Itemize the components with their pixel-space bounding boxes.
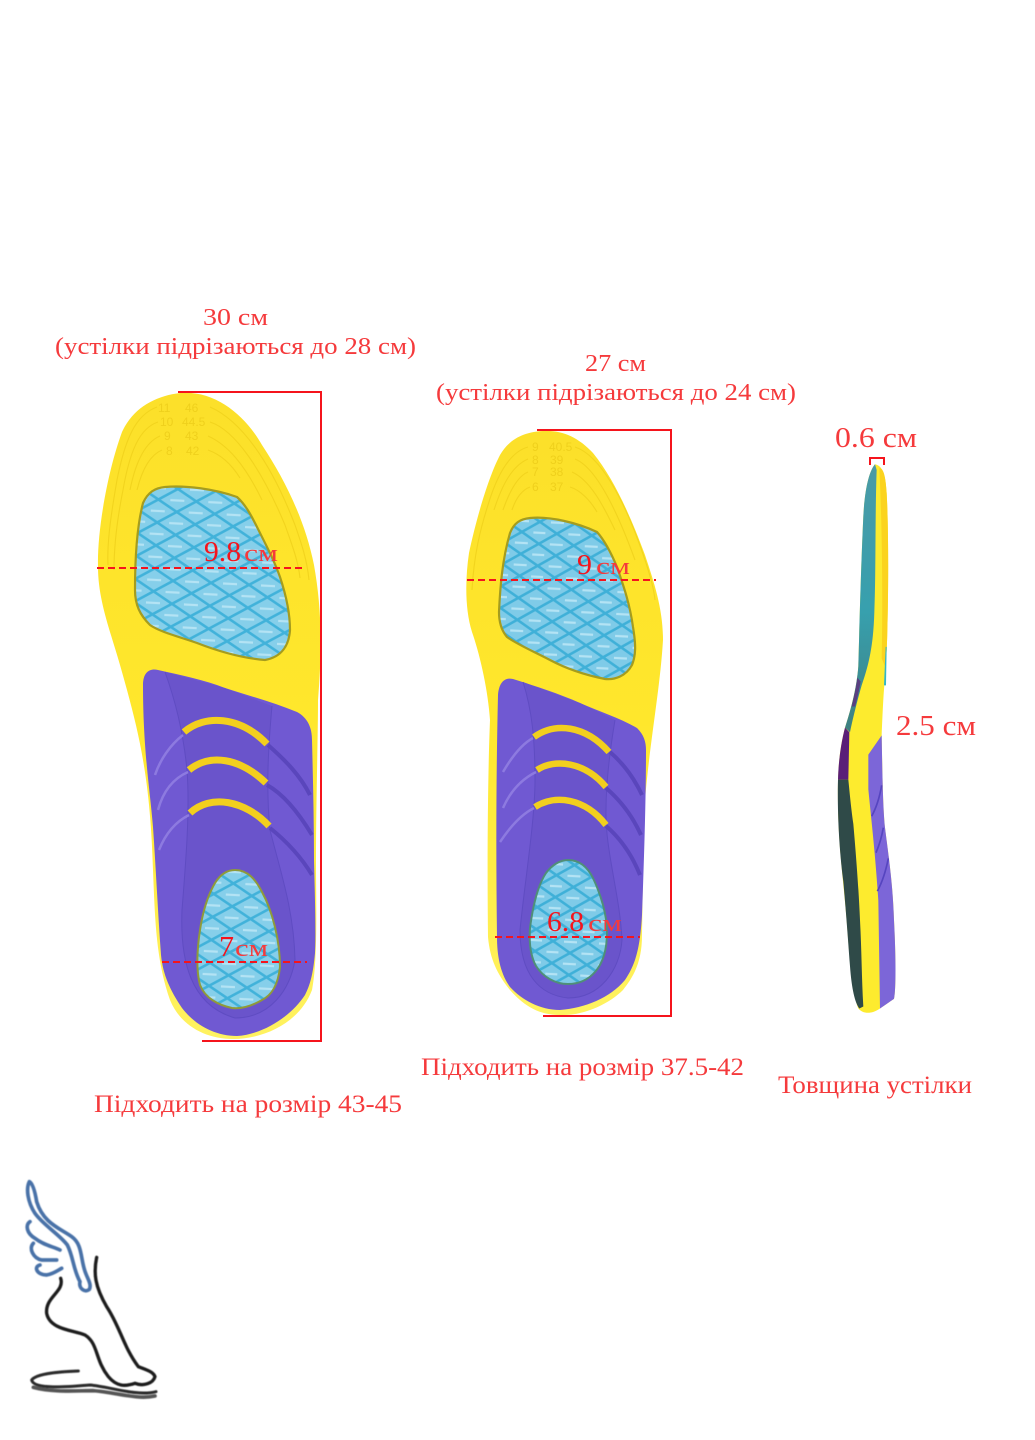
central textured zone bbox=[520, 682, 622, 998]
large insole bbox=[98, 393, 321, 1039]
thickness label arch: 2.5 см bbox=[896, 710, 976, 742]
embossed size numbers: 8 bbox=[166, 444, 173, 458]
embossed size numbers: 38 bbox=[550, 465, 564, 479]
arch grooves bbox=[872, 785, 888, 891]
large heel width label: см bbox=[235, 936, 268, 962]
dark mesh cover bbox=[838, 780, 863, 1008]
purple cover sliver bbox=[852, 678, 861, 707]
medium insole length label bbox=[436, 351, 796, 406]
medium forefoot width label: см bbox=[596, 554, 630, 580]
embossed size numbers: 39 bbox=[550, 453, 564, 467]
yellow insole body bbox=[98, 393, 321, 1039]
medium insole bbox=[466, 431, 663, 1015]
yellow insole body bbox=[466, 431, 663, 1015]
large insole length label bbox=[55, 305, 416, 360]
dashed width line: large heel bbox=[162, 961, 307, 963]
yellow arch arcs bbox=[184, 720, 269, 826]
wing and foot logo bbox=[27, 1182, 156, 1397]
embossed size numbers bbox=[532, 440, 573, 494]
embossed size numbers: 9 bbox=[164, 429, 171, 443]
large forefoot width label: см bbox=[244, 541, 278, 567]
large heel width label: 7 bbox=[219, 932, 234, 963]
panel contour lines bbox=[155, 672, 312, 1018]
dashed width line: medium heel bbox=[495, 936, 640, 938]
yellow arch arcs bbox=[534, 728, 609, 825]
medium heel width label: 6.8 bbox=[547, 907, 584, 938]
embossed size contours bbox=[108, 407, 309, 580]
rearfoot purple panel bbox=[143, 670, 315, 1036]
yellow core bbox=[838, 464, 895, 1013]
large insole length label: (устілки підрізаються до 28 см) bbox=[55, 334, 416, 360]
cyan sliver bbox=[884, 647, 887, 685]
dashed width line: medium forefoot bbox=[467, 579, 656, 581]
thickness label top: 0.6 см bbox=[835, 422, 917, 454]
foot bbox=[47, 1257, 155, 1385]
embossed size numbers: 8 bbox=[532, 453, 539, 467]
embossed size numbers: 37 bbox=[550, 480, 564, 494]
medium insole length label: 27 см bbox=[585, 351, 646, 377]
insole side profile bbox=[838, 464, 895, 1013]
teal top cover bbox=[845, 464, 877, 732]
embossed size numbers: 7 bbox=[532, 465, 539, 479]
large size caption: Підходить на розмір 43-45 bbox=[94, 1091, 402, 1118]
heel gel pad bbox=[530, 860, 607, 984]
embossed size numbers: 46 bbox=[185, 401, 199, 415]
embossed size numbers: 42 bbox=[186, 444, 200, 458]
rearfoot purple panel bbox=[496, 679, 646, 1010]
medium heel width label bbox=[547, 907, 622, 938]
large forefoot width label: 9.8 bbox=[204, 537, 241, 568]
panel contour lines bbox=[500, 682, 642, 998]
sole bbox=[32, 1371, 156, 1397]
embossed size numbers: 6 bbox=[532, 480, 539, 494]
forefoot gel pad bbox=[135, 486, 290, 660]
wing bbox=[27, 1182, 90, 1291]
embossed size numbers: 40.5 bbox=[549, 440, 573, 454]
large insole length bracket bbox=[178, 392, 321, 1041]
medium forefoot width label: 9 bbox=[577, 550, 592, 581]
medium insole length bracket bbox=[537, 430, 671, 1016]
embossed size contours bbox=[472, 447, 655, 600]
thickness bracket bbox=[870, 458, 884, 465]
central textured zone bbox=[165, 672, 295, 1018]
medium forefoot width label bbox=[577, 550, 630, 581]
embossed size numbers: 44.5 bbox=[182, 415, 206, 429]
embossed size numbers bbox=[158, 401, 206, 458]
purple underside bbox=[868, 735, 895, 1008]
deep yellow top layer bbox=[879, 468, 888, 666]
forefoot gel pad bbox=[499, 518, 635, 679]
large insole length label: 30 см bbox=[203, 305, 268, 331]
embossed size numbers: 43 bbox=[185, 429, 199, 443]
embossed size numbers: 11 bbox=[158, 401, 171, 415]
heel gel pad bbox=[197, 870, 280, 1008]
embossed size numbers: 9 bbox=[532, 440, 539, 454]
purple cover patch bbox=[838, 728, 849, 780]
embossed size numbers: 10 bbox=[160, 415, 174, 429]
medium heel width label: см bbox=[588, 911, 622, 937]
medium size caption: Підходить на розмір 37.5-42 bbox=[421, 1054, 744, 1081]
dashed width line: large forefoot bbox=[97, 567, 302, 569]
large heel width label bbox=[219, 932, 268, 963]
medium insole length label: (устілки підрізаються до 24 см) bbox=[436, 380, 796, 406]
thickness caption: Товщина устілки bbox=[778, 1072, 972, 1099]
large forefoot width label bbox=[204, 537, 278, 568]
